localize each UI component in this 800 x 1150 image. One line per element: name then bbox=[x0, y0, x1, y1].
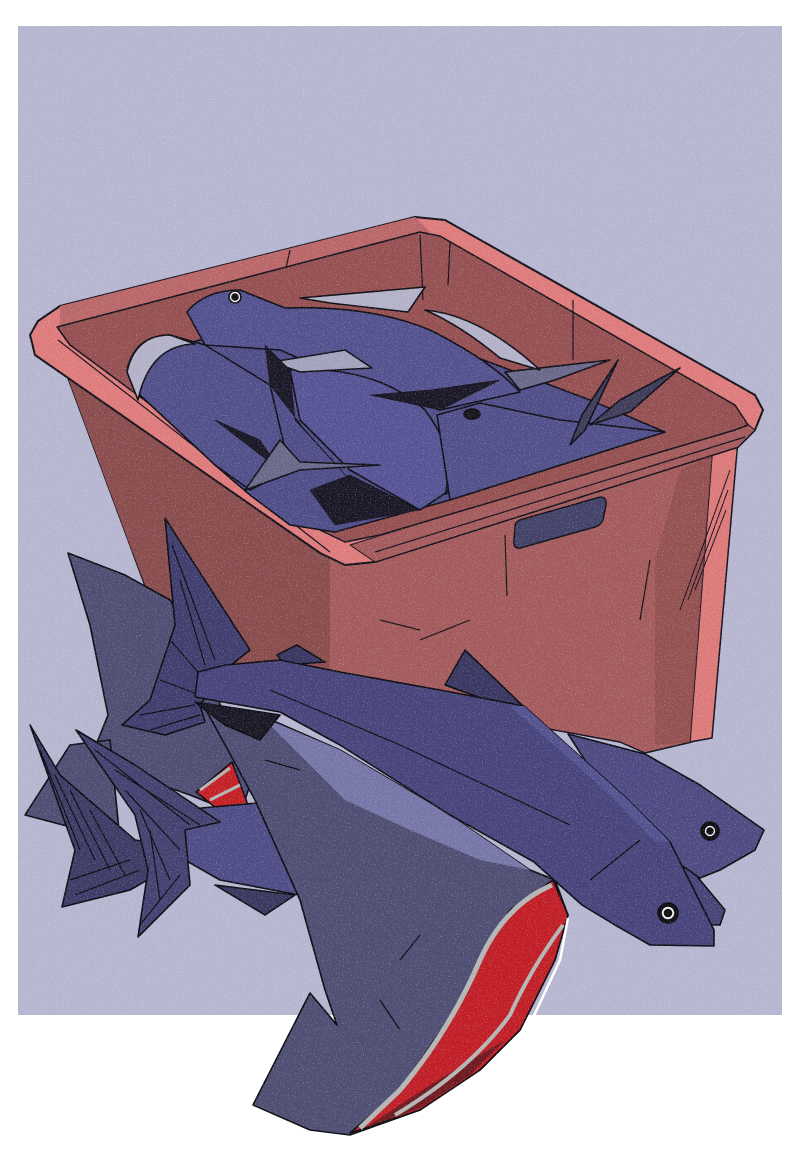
red cut face bbox=[350, 880, 568, 1133]
upright fins bbox=[570, 360, 680, 445]
main fish tail bbox=[122, 518, 250, 735]
left fish bbox=[127, 335, 290, 490]
crate bbox=[30, 217, 763, 753]
second fish bbox=[568, 734, 764, 878]
crate body bbox=[62, 362, 738, 753]
second tail hatching bbox=[95, 750, 200, 925]
grey stripes in cut bbox=[360, 885, 552, 1128]
second fish eye bbox=[701, 822, 719, 840]
lower fin bbox=[215, 885, 295, 915]
small fin on centre fish bbox=[272, 350, 372, 372]
left fish highlight bbox=[127, 335, 195, 400]
dark part of cut bbox=[365, 1040, 505, 1128]
back grey fish bbox=[68, 553, 250, 815]
top fish back bbox=[425, 310, 540, 370]
main fish bbox=[195, 660, 714, 946]
group of fish in foreground bbox=[25, 518, 764, 1138]
light strip on cut fish bbox=[262, 717, 530, 870]
main fish back highlight bbox=[510, 706, 670, 842]
top fish dorsal fin bbox=[300, 287, 425, 312]
crate inner wall bbox=[57, 232, 748, 542]
top fish bbox=[187, 290, 520, 410]
tail in heap bbox=[245, 440, 380, 490]
dark fin on grey fish bbox=[195, 702, 280, 740]
heap base bbox=[130, 340, 665, 532]
crate handle bbox=[514, 497, 606, 548]
main tail hatching bbox=[140, 545, 215, 730]
centre fish bbox=[290, 370, 451, 510]
main fish dorsal fin bbox=[277, 645, 525, 708]
right fish eye bbox=[464, 409, 480, 419]
crate front rim shade bbox=[350, 422, 755, 562]
main fish eye bbox=[658, 903, 678, 923]
grey cut fish bbox=[205, 708, 568, 1135]
lower left fish bbox=[180, 800, 340, 897]
back fish cut bbox=[196, 762, 248, 815]
top fish eye bbox=[229, 291, 241, 303]
crate right pink edge bbox=[690, 440, 738, 742]
crate left face bbox=[62, 362, 330, 700]
far left fish tail bbox=[30, 725, 200, 907]
dark shadows in heap bbox=[215, 345, 500, 525]
left grey tail bbox=[25, 740, 120, 840]
crate right shadow bbox=[655, 455, 712, 745]
top fish tail fin bbox=[505, 360, 610, 390]
far left tail hatching bbox=[40, 750, 140, 895]
second left fish tail bbox=[76, 730, 220, 937]
right fish bbox=[437, 403, 665, 500]
fish heap in crate bbox=[127, 287, 680, 532]
crate rim bbox=[30, 217, 763, 565]
crate hatching right bbox=[680, 470, 730, 610]
third fish head bbox=[650, 830, 725, 925]
crate back rim shade bbox=[60, 217, 430, 326]
back fish cut stripes bbox=[200, 768, 240, 800]
